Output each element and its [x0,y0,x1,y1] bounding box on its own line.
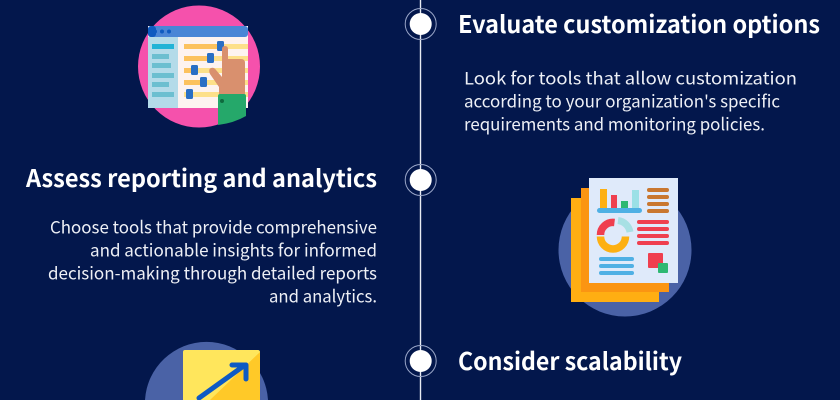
timeline line [420,0,421,400]
timeline node 1 [405,8,436,40]
timeline node 2 [405,164,436,196]
text block: customization description: according to your organization's specific [464,88,780,112]
text block: reporting description: Choose tools that provide comprehensive [50,214,377,238]
text block: reporting description: and actionable insights for informed [90,236,377,262]
text block: customization description [464,64,797,136]
text block: reporting description: decision-making through detailed reports [48,260,377,284]
text block: reporting description: and analytics. [269,282,377,308]
text block: customization description: Look for tools that allow customization [464,64,797,90]
heading: Assess reporting and analytics: Assess reporting and analytics [25,159,377,194]
icon: dashboard with sliders and hand [138,6,260,128]
timeline node 3 [405,346,436,376]
heading: Evaluate customization options: Evaluate customization options [458,5,820,40]
icon: report documents with charts [558,178,692,316]
heading: Consider scalability: Consider scalability [458,342,682,377]
icon: scalability arrow on yellow square [145,342,268,400]
text block: reporting description [48,214,377,308]
text block: customization description: requirements and monitoring policies. [464,110,765,136]
